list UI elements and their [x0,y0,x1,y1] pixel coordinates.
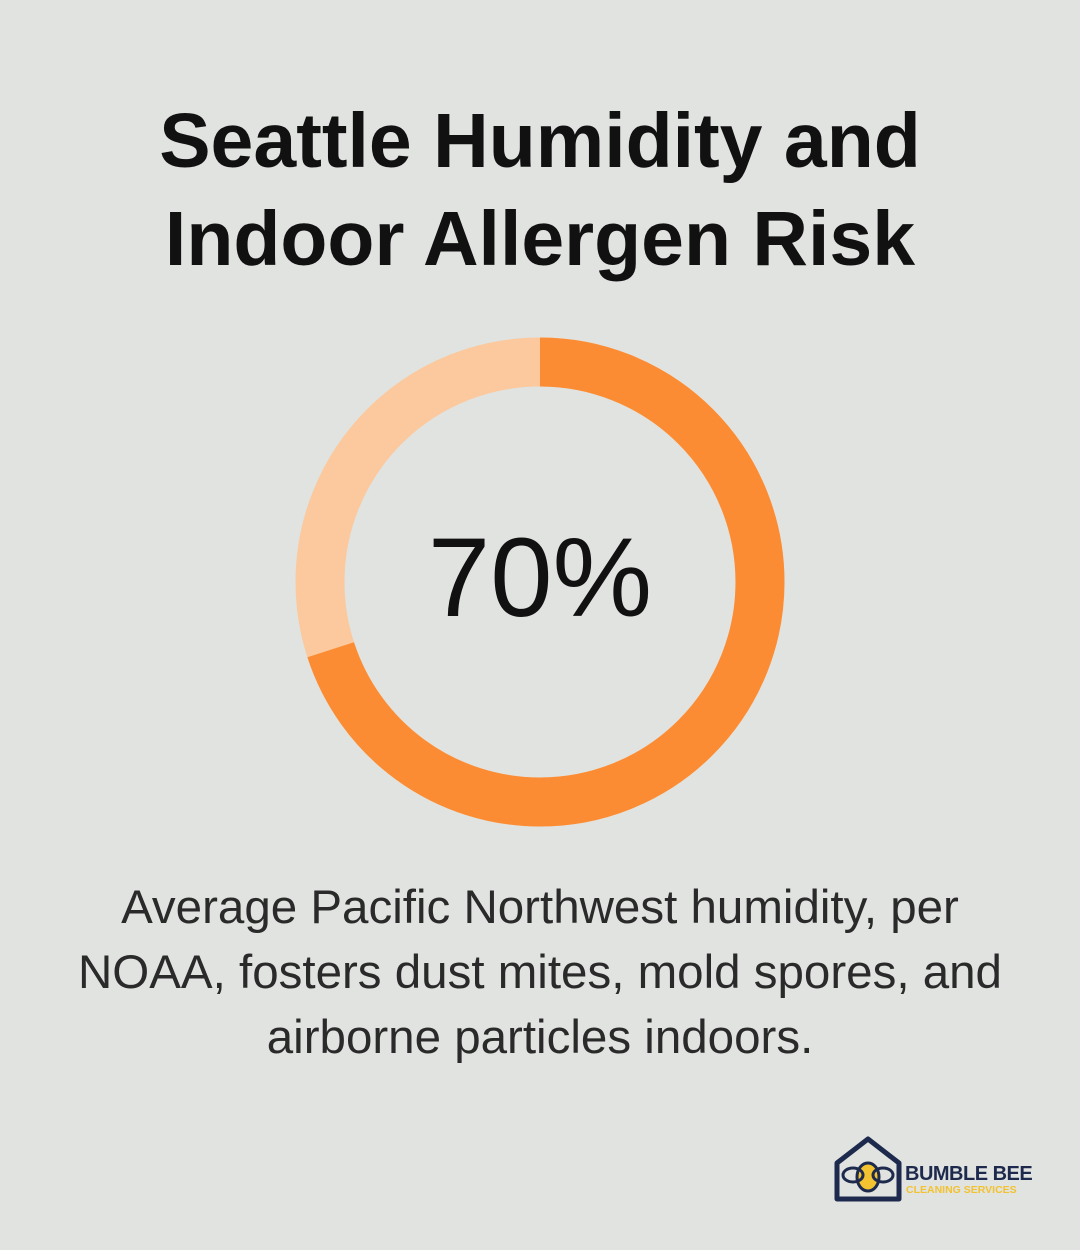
title: Indoor Allergen Risk [165,196,915,282]
description: Average Pacific Northwest humidity, per [121,881,959,934]
logo: BUMBLE BEE [905,1163,1032,1185]
description [78,881,1002,1064]
title: Seattle Humidity and [159,98,921,184]
percentage: 70% [428,515,652,640]
logo: CLEANING SERVICES [906,1184,1017,1196]
description: NOAA, fosters dust mites, mold spores, and [78,946,1002,999]
logo [834,1136,1032,1202]
title [159,98,921,282]
description: airborne particles indoors. [267,1011,813,1064]
donut chart [296,338,784,826]
